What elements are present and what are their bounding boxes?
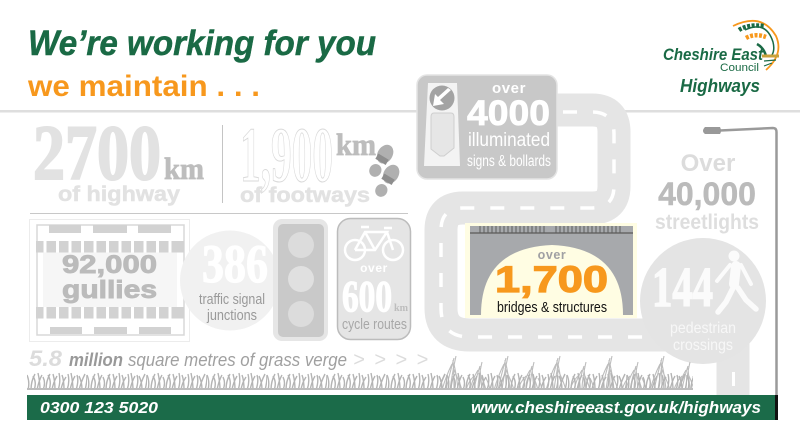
divider (222, 125, 223, 203)
road (441, 110, 733, 395)
panel: bridges and structures: 1,700 (495, 259, 608, 300)
icon: walking person (717, 250, 756, 312)
icon: bollard (424, 83, 460, 166)
stat: 2700 km of highway: 2700 (33, 109, 161, 196)
stat: 40,000 streetlights: streetlights (655, 211, 759, 234)
stat: 40,000 streetlights (655, 150, 759, 234)
grass verge caption: square metres of grass verge (128, 350, 347, 370)
website: www.cheshireeast.gov.uk/highways (471, 398, 761, 417)
icon: street lamp (703, 127, 776, 395)
grass verge caption: > > > > (353, 349, 428, 371)
stat: 2700 km of highway: km (164, 151, 204, 186)
panel: bridges and structures: bridges & structures (497, 299, 607, 316)
panel: bridges and structures (465, 223, 637, 318)
logo council: Council (720, 62, 759, 74)
panel: gullies: 92,000 (62, 251, 157, 279)
panel: traffic signal junctions (180, 230, 280, 330)
stat: 1,900 km of footways: 1,900 (240, 111, 333, 198)
icon: footprints (366, 142, 403, 200)
grass verge caption (29, 346, 428, 371)
panel: pedestrian crossings (640, 238, 766, 386)
section rule (30, 213, 408, 214)
stat: 40,000 streetlights: 40,000 (658, 176, 756, 212)
panel: bridges and structures: over (538, 248, 566, 262)
logo name: Cheshire East (663, 46, 764, 64)
footer bar (27, 395, 778, 420)
panel: cycle routes: over (360, 261, 388, 275)
panel: pedestrian crossings: pedestrian (670, 320, 736, 337)
panel: gullies: gullies (62, 276, 157, 304)
panel: pedestrian crossings: crossings (673, 337, 733, 354)
title: We’re working for you (28, 24, 376, 63)
icon: bicycle (345, 227, 403, 260)
header rule (0, 110, 800, 112)
panel: traffic signal junctions: traffic signal (199, 291, 265, 308)
panel: gullies (30, 220, 190, 342)
panel: traffic signal junctions: junctions (206, 307, 257, 324)
panel: cycle routes: cycle routes (342, 316, 407, 333)
panel: illuminated signs and bollards: signs & bollards (467, 153, 551, 170)
grass verge caption: million (69, 350, 123, 370)
icon: traffic light (273, 219, 328, 341)
stat: 40,000 streetlights: Over (681, 150, 735, 177)
phone number: 0300 123 5020 (40, 400, 158, 417)
stat: 1,900 km of footways: of footways (240, 184, 370, 207)
panel: cycle routes (338, 218, 410, 340)
panel: illuminated signs and bollards: illuminated (468, 130, 550, 151)
panel: illuminated signs and bollards: 4000 (467, 94, 550, 133)
panel: illuminated signs and bollards (417, 75, 557, 179)
stat: 1,900 km of footways: km (336, 127, 376, 162)
stat: 2700 km of highway: of highway (58, 183, 180, 206)
panel: pedestrian crossings: 144 (652, 257, 713, 319)
logo highways: Highways (680, 75, 760, 96)
logo emblem (733, 21, 779, 70)
panel: cycle routes: km (394, 302, 408, 314)
panel: cycle routes: 600 (342, 272, 392, 321)
panel: illuminated signs and bollards: over (492, 80, 526, 97)
grass (27, 354, 693, 390)
logo (663, 21, 779, 96)
grass verge caption: 5.8 (29, 346, 63, 371)
subtitle: we maintain . . . (27, 70, 260, 103)
panel: traffic signal junctions: 386 (202, 234, 268, 294)
